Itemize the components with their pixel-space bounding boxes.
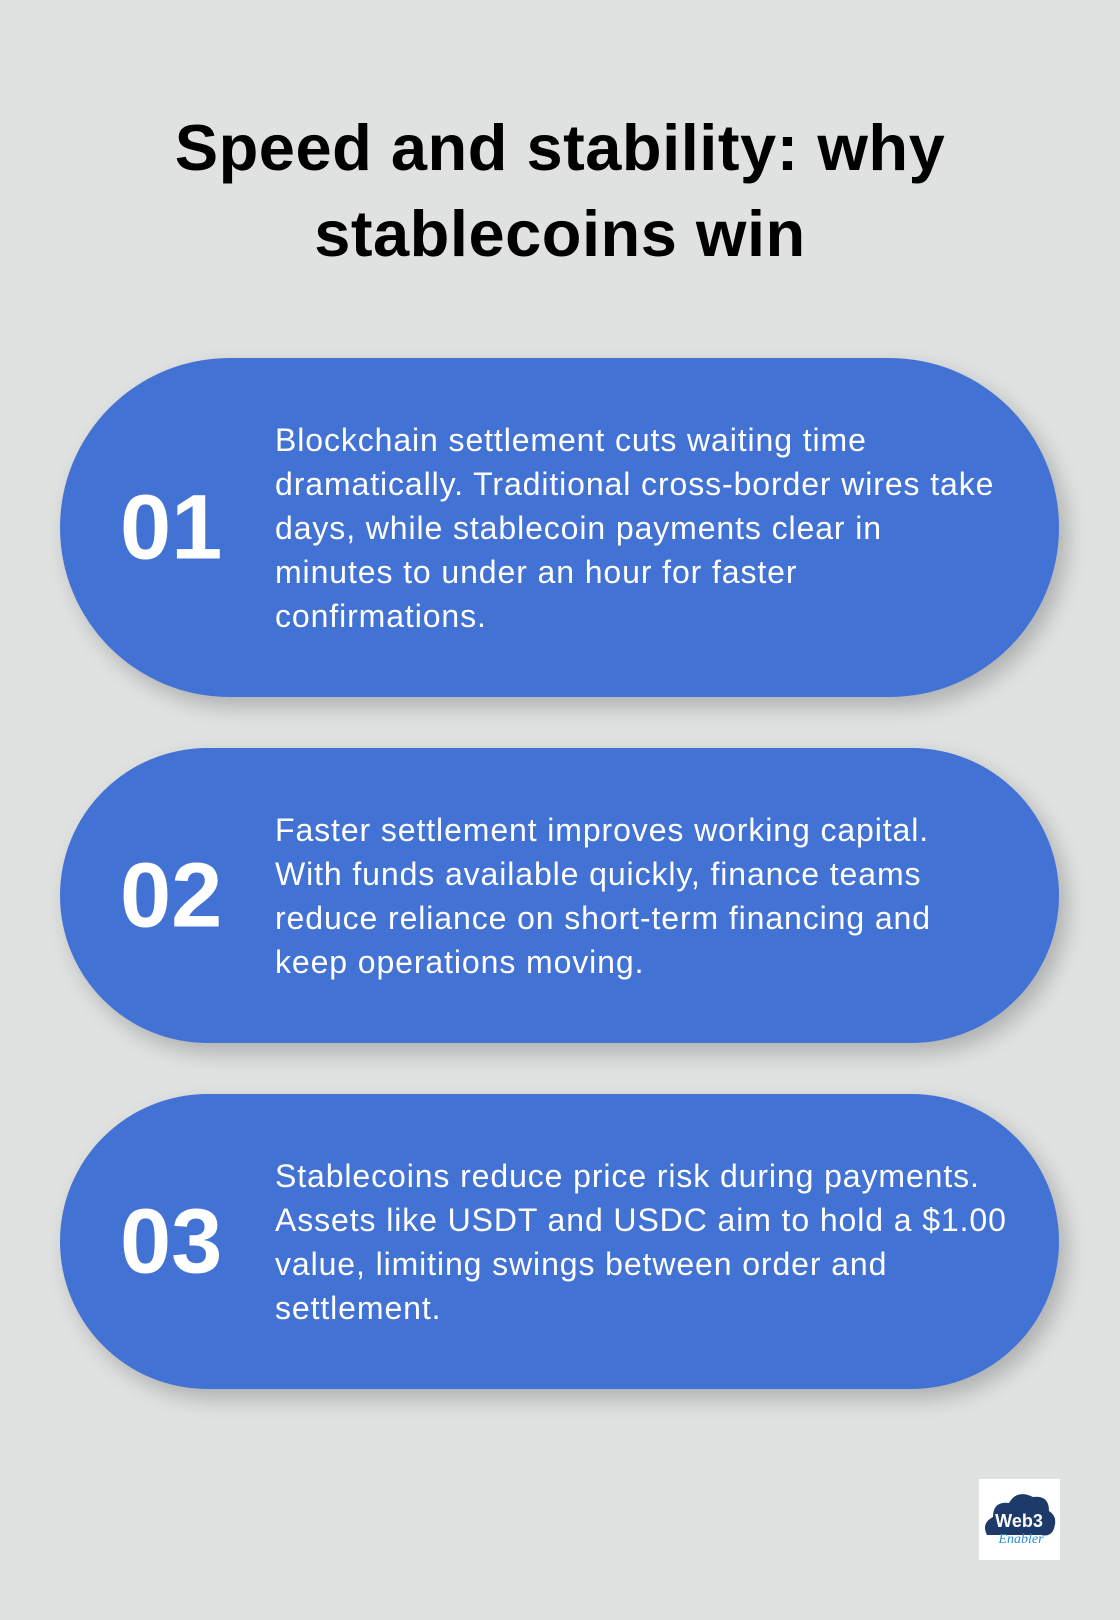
text 02: reduce reliance on short-term financing and	[275, 900, 931, 936]
text 01: minutes to under an hour for faster	[275, 554, 797, 590]
logo	[979, 1479, 1060, 1560]
text 02: With funds available quickly, finance teams	[275, 856, 921, 892]
text 03: Assets like USDT and USDC aim to hold a $1.00	[275, 1202, 1007, 1238]
text 03	[275, 1158, 1007, 1326]
text 01: Blockchain settlement cuts waiting time	[275, 422, 867, 458]
panel: 02	[60, 748, 1059, 1043]
title: stablecoins win	[314, 197, 806, 270]
title	[175, 111, 945, 270]
number 02: 02	[120, 844, 222, 946]
text 03: value, limiting swings between order and	[275, 1246, 887, 1282]
text 01: dramatically. Traditional cross-border wires take	[275, 466, 994, 502]
number 01: 01	[120, 476, 222, 578]
text 01: days, while stablecoin payments clear in	[275, 510, 882, 546]
logo: Enabler	[997, 1532, 1044, 1547]
text 01: confirmations.	[275, 598, 487, 634]
text 03: Stablecoins reduce price risk during payments.	[275, 1158, 980, 1194]
title: Speed and stability: why	[175, 111, 945, 184]
text 02	[275, 812, 931, 980]
text 03: settlement.	[275, 1290, 441, 1326]
number 03: 03	[120, 1190, 222, 1292]
panel: 01	[60, 358, 1059, 697]
panel: 03	[60, 1094, 1059, 1389]
text 01	[275, 422, 994, 634]
text 02: keep operations moving.	[275, 944, 644, 980]
text 02: Faster settlement improves working capital.	[275, 812, 929, 848]
logo: Web3	[995, 1511, 1043, 1531]
